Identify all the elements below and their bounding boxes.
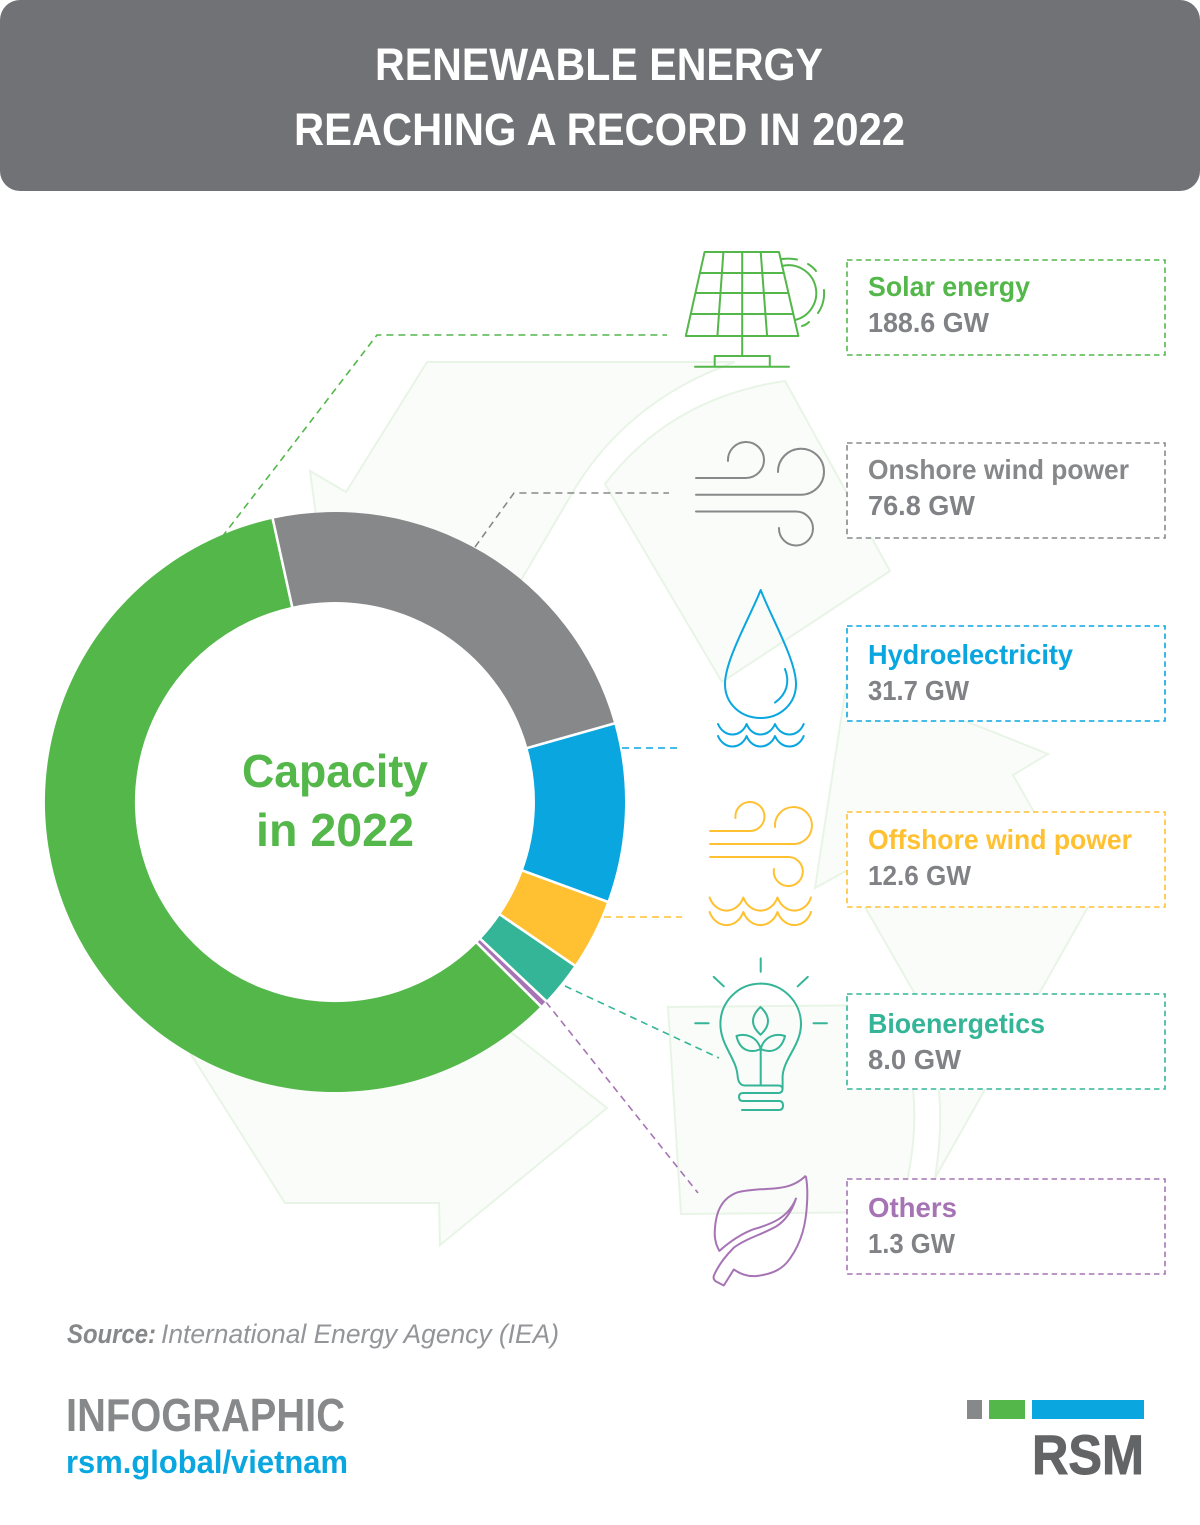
segment: offshore wind	[500, 871, 607, 965]
footer: website: rsm.global/vietnam	[66, 1444, 348, 1480]
segment: solar	[45, 519, 541, 1092]
segment: onshore wind	[273, 512, 614, 748]
label: offshore wind power: 12.6 GW	[868, 860, 972, 891]
RSM logo: RSM	[1032, 1423, 1144, 1486]
connector: offshore wind	[604, 916, 682, 918]
title banner	[0, 0, 1200, 191]
connector: onshore wind	[475, 493, 669, 547]
icon: leaf	[714, 1176, 807, 1286]
background recycling arrows	[185, 362, 1088, 1245]
icon: light bulb with sprout	[695, 958, 827, 1110]
donut centre label: in 2022	[256, 804, 414, 856]
donut centre label: Capacity	[242, 745, 428, 797]
label: others: 1.3 GW	[868, 1228, 956, 1259]
icon: water drop	[718, 590, 804, 746]
connector: others	[546, 1002, 698, 1193]
source note: Source:	[67, 1319, 156, 1349]
icon: solar panel	[686, 252, 824, 367]
title	[294, 39, 905, 155]
label: solar energy	[847, 260, 1165, 355]
label: offshore wind power: Offshore wind power	[868, 824, 1132, 855]
donut chart	[45, 512, 625, 1092]
donut centre label	[242, 745, 428, 856]
label: onshore wind power: Onshore wind power	[868, 454, 1129, 485]
label: solar energy: 188.6 GW	[868, 307, 990, 338]
label: hydroelectricity	[847, 626, 1165, 721]
icon: onshore wind	[696, 442, 824, 545]
label: others: Others	[868, 1192, 957, 1223]
label: others	[847, 1179, 1165, 1274]
connector: solar	[222, 335, 667, 537]
label: bioenergetics: Bioenergetics	[868, 1008, 1045, 1039]
segment: bioenergetics	[481, 915, 575, 1001]
label: solar energy: Solar energy	[868, 271, 1030, 302]
connector: bioenergetics	[565, 986, 719, 1058]
label: bioenergetics	[847, 994, 1165, 1089]
label: hydroelectricity: Hydroelectricity	[868, 639, 1073, 670]
label: bioenergetics: 8.0 GW	[868, 1044, 962, 1075]
title: RENEWABLE ENERGY	[375, 39, 823, 90]
label: onshore wind power: 76.8 GW	[868, 490, 976, 521]
footer: infographic label: INFOGRAPHIC	[66, 1389, 345, 1441]
label: offshore wind power	[847, 812, 1165, 907]
icon: offshore wind	[710, 802, 812, 925]
segment: hydro	[523, 724, 625, 902]
connector: hydro	[622, 747, 680, 749]
segment: others	[477, 939, 546, 1006]
RSM logo	[967, 1400, 1144, 1486]
label: hydroelectricity: 31.7 GW	[868, 675, 970, 706]
label: onshore wind power	[847, 443, 1165, 538]
title: REACHING A RECORD IN 2022	[294, 104, 905, 155]
source note: International Energy Agency (IEA)	[161, 1319, 559, 1349]
